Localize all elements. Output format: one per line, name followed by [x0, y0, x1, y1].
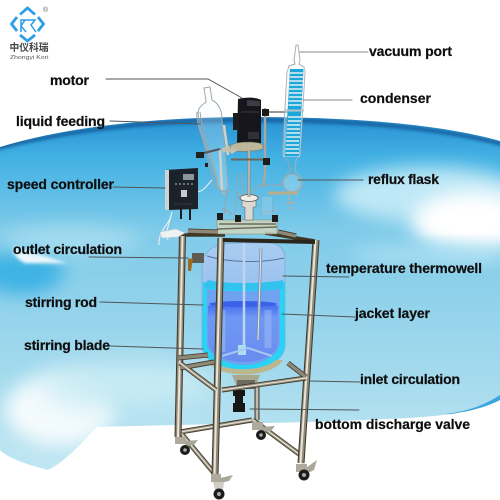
labels: [7, 43, 482, 432]
label: reflux flask: reflux flask: [368, 171, 439, 187]
line: temperature thermowell: [283, 276, 349, 277]
label: outlet circulation: outlet circulation: [13, 241, 122, 257]
central stirrer seal: [242, 198, 256, 220]
stand pole and clamps: [263, 108, 265, 187]
logo chinese name: 中仪科瑞: [10, 41, 48, 54]
line: reflux flask: [298, 179, 363, 181]
line: speed controller: [113, 187, 165, 188]
label: bottom discharge valve: bottom discharge valve: [315, 416, 470, 432]
icon: logo diamond: [12, 8, 44, 41]
reactor lid and clamp: [188, 173, 296, 236]
logo: [10, 6, 49, 61]
condenser cooling coil: [285, 69, 304, 156]
label: condenser: condenser: [360, 90, 432, 106]
icon: glass reactor vessel: [188, 243, 285, 385]
outlet valve: [192, 253, 204, 263]
motor: [228, 98, 290, 197]
caster back right: [252, 422, 275, 440]
label: stirring blade: stirring blade: [24, 337, 110, 353]
power cables: [159, 180, 212, 245]
line: inlet circulation: [310, 381, 360, 382]
registered mark: ®: [43, 6, 49, 14]
line: vacuum port: [300, 51, 368, 53]
vessel highlight band: [207, 256, 284, 262]
lid knobs: [217, 213, 278, 222]
reflux flask: [284, 174, 300, 192]
glass necks: [224, 192, 272, 215]
label: jacket layer: jacket layer: [354, 305, 431, 321]
line: stirring blade: [110, 346, 203, 349]
cyan jacket water: [202, 282, 285, 371]
speed controller box: [159, 168, 212, 245]
line: outlet circulation: [89, 257, 188, 258]
background: blue sky dome: [0, 110, 500, 480]
reactor frame back: [178, 233, 315, 473]
line: jacket layer: [282, 314, 355, 317]
casters: [175, 422, 317, 500]
icon: condenser: [253, 45, 305, 208]
inner water: [208, 303, 278, 362]
label: speed controller: speed controller: [7, 176, 115, 192]
vessel bottom collar: [208, 360, 283, 375]
caster front left: [211, 474, 233, 500]
label: inlet circulation: inlet circulation: [360, 371, 460, 387]
vessel outer glass: [202, 243, 285, 371]
reactor frame front: [178, 238, 316, 475]
line: bottom discharge valve: [250, 409, 359, 410]
line: liquid feeding: [110, 121, 200, 124]
thermowell: [258, 248, 261, 340]
stirring rod: [243, 243, 245, 345]
jacket inner: [207, 289, 280, 365]
caster back left: [175, 437, 198, 455]
label: motor: motor: [50, 72, 90, 88]
line: motor: [106, 79, 242, 98]
bottom discharge valve: [233, 380, 255, 412]
line: condenser: [303, 99, 352, 101]
label: liquid feeding: liquid feeding: [16, 113, 105, 129]
label: stirring rod: stirring rod: [25, 294, 97, 310]
caster front right: [296, 460, 317, 480]
label: vacuum port: vacuum port: [369, 43, 452, 59]
callout lines: [89, 52, 368, 410]
icon: liquid feeding funnel: [196, 87, 232, 196]
logo latin name: Zhongyi Kori: [10, 55, 48, 61]
line: stirring rod: [100, 302, 203, 305]
label: temperature thermowell: temperature thermowell: [326, 260, 482, 276]
